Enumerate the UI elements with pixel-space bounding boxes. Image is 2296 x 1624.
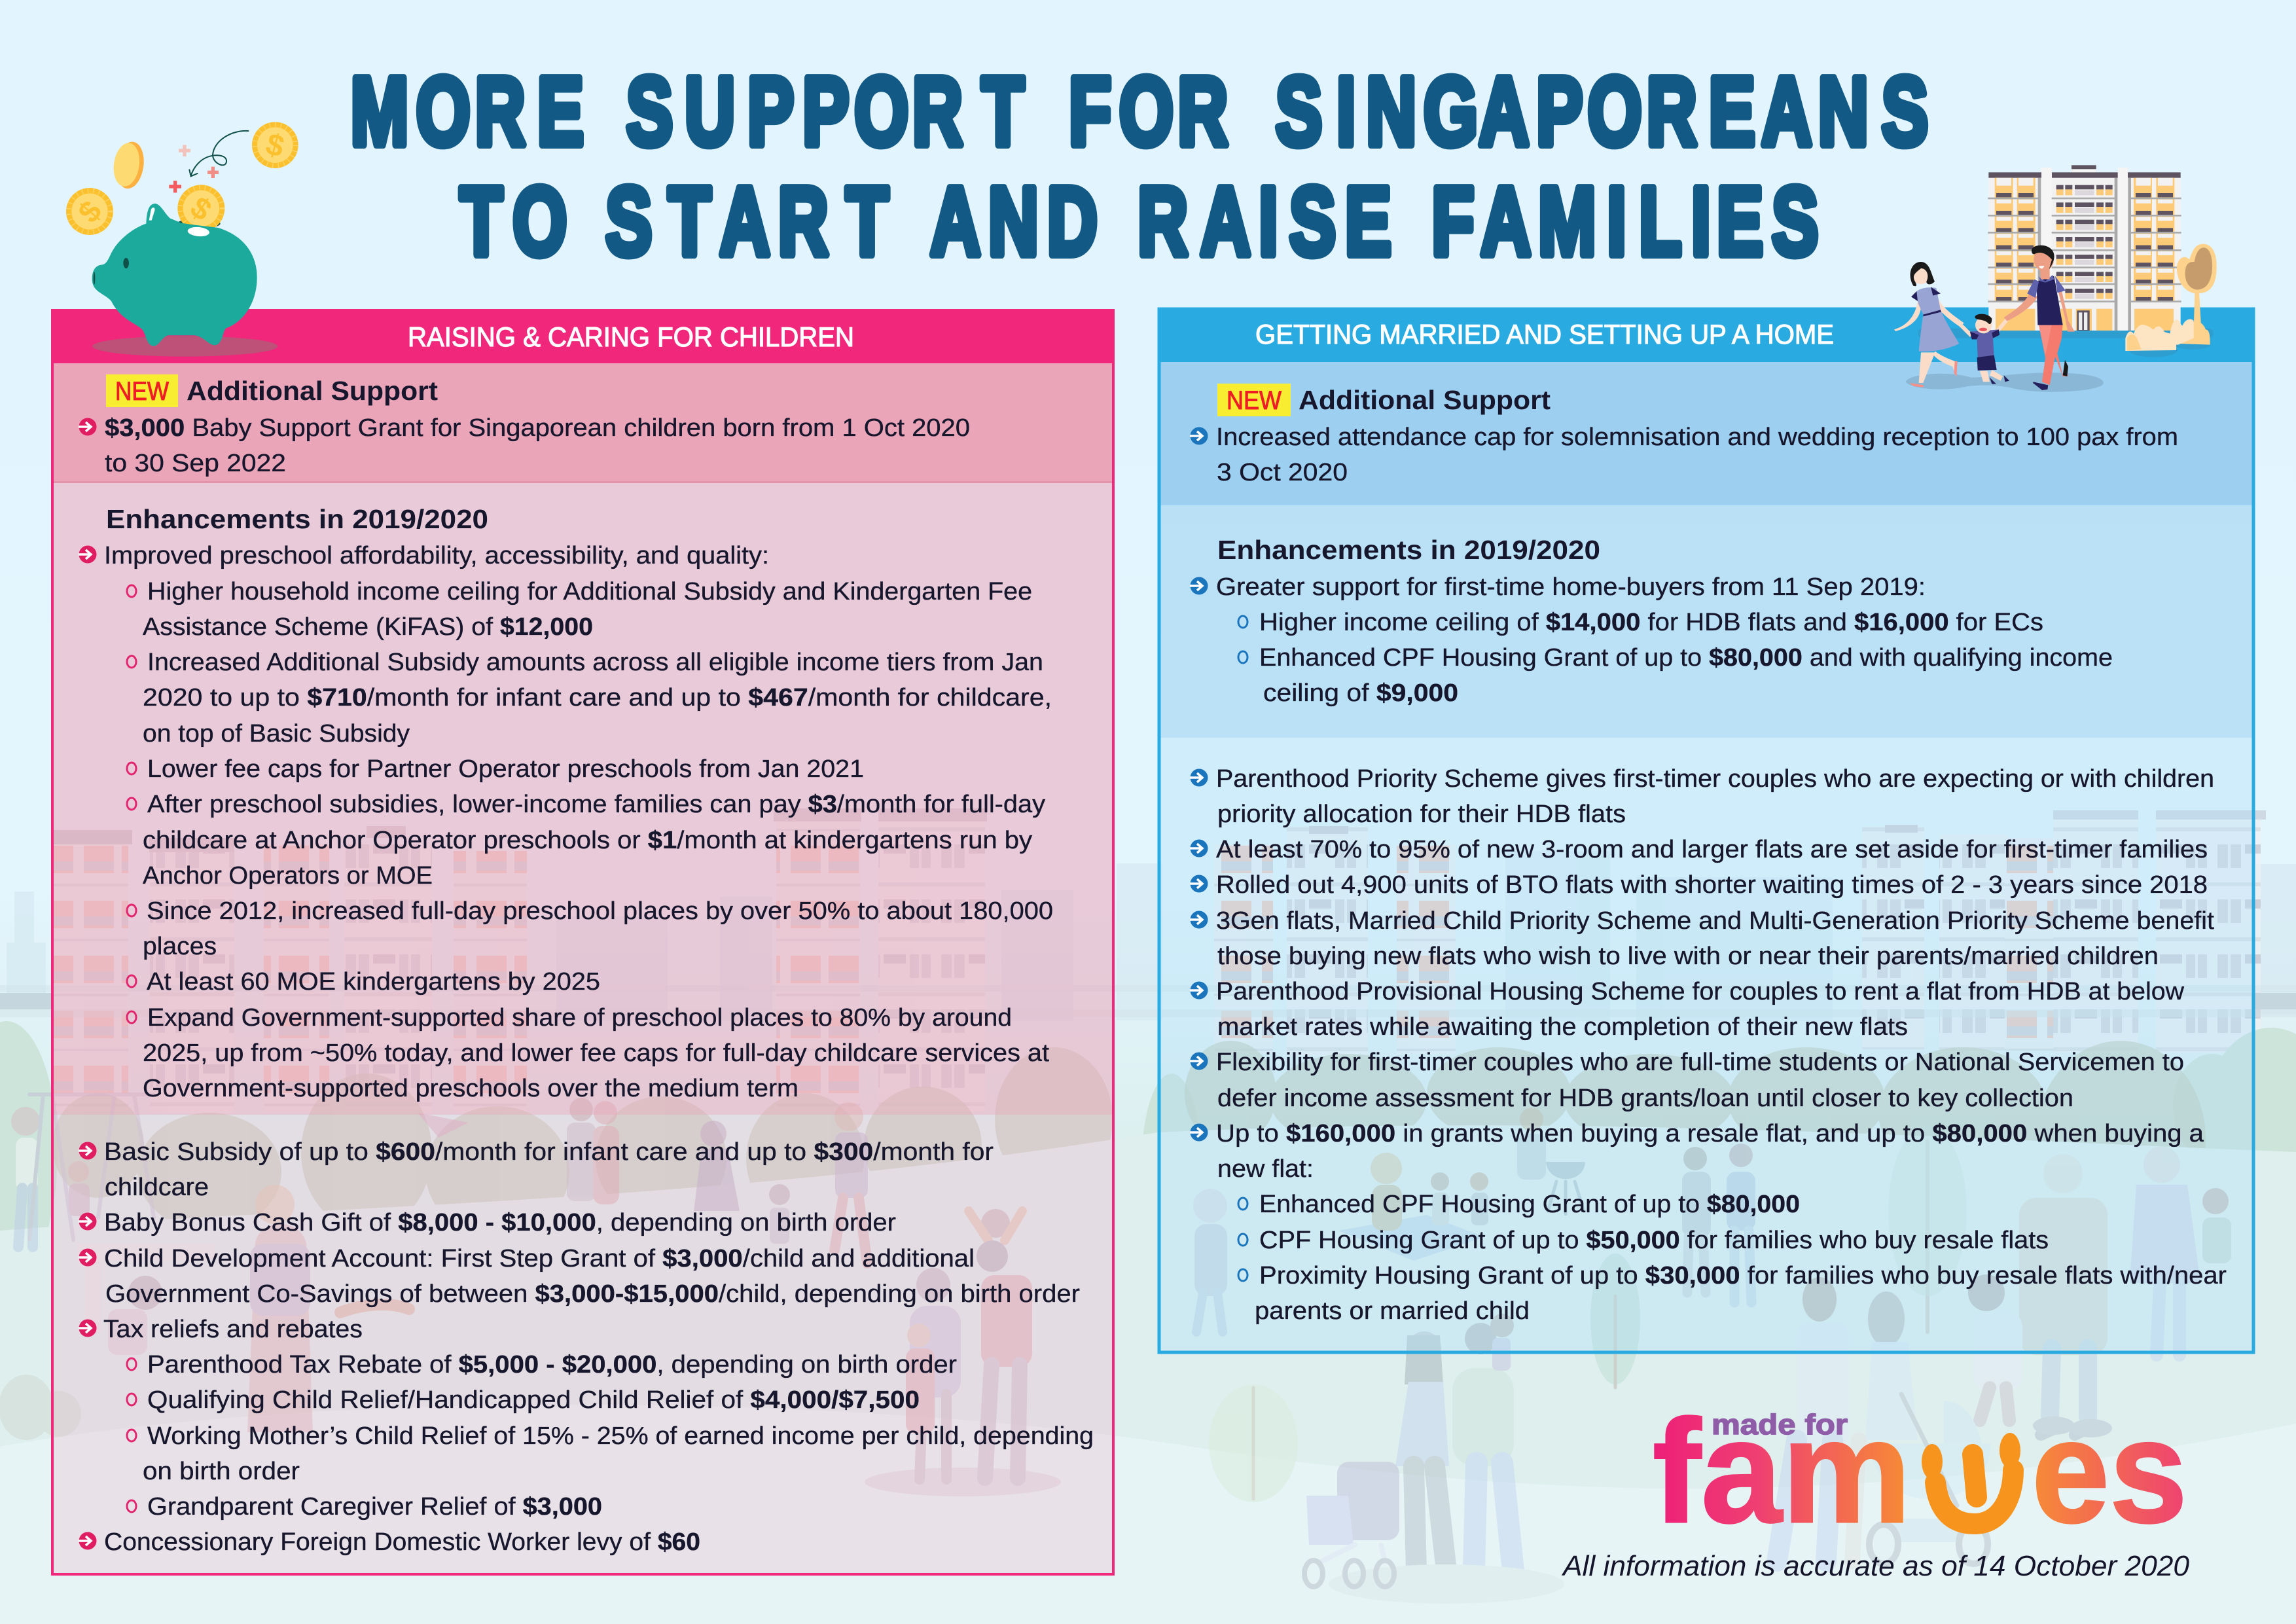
figure: grandmother far left of right panel [1193, 1189, 1227, 1332]
sub bullet: income ceiling: Higher income ceiling of $14,000 for HDB flats and $16,000 for ECs [1259, 609, 2043, 636]
panel body tint [51, 309, 1115, 1576]
figure: pregnant woman and man with child [1329, 1314, 1564, 1604]
sub bullet: proximity grant: Proximity Housing Grant of up to $30,000 for families who buy resale flats with/near [1259, 1262, 2227, 1290]
pig nostril [94, 272, 95, 285]
sub bullet: after preschool subsidies [127, 791, 1045, 890]
text block: left new additional support [79, 374, 970, 477]
bullet: 3Gen flats [1190, 907, 2214, 970]
coin: entering slot [177, 185, 224, 232]
heading: additional support: Additional Support [1299, 385, 1551, 415]
bullet: parenthood priority scheme: priority allocation for their HDB flats [1217, 801, 1626, 828]
bullet: foreign domestic worker levy: Concessionary Foreign Domestic Worker levy of $60 [104, 1528, 700, 1556]
bullet: flexibility for students [1190, 1049, 2184, 1112]
coin: entering slot: $ [185, 190, 218, 227]
sub bullet: additional subsidy amounts: on top of Basic Subsidy [143, 720, 410, 748]
sub bullet: lower fee caps: Lower fee caps for Partner Operator preschools from Jan 2021 [147, 755, 864, 783]
building ground floor [1996, 309, 2174, 331]
panel: getting married and setting up a home [1158, 308, 2255, 1354]
coin: left: $ [71, 194, 109, 229]
footnote: All information is accurate as of 14 October 2020 [1561, 1550, 2190, 1582]
slot [177, 219, 221, 228]
building ledges [1988, 198, 2181, 302]
figure: woman [1894, 262, 1964, 388]
new badge: NEW [1227, 386, 1282, 415]
text block: right enhancements in 2019/2020 [1190, 535, 2113, 707]
sub bullet: income ceiling: Higher household income ceiling for Additional Subsidy and Kindergarten Fee [147, 578, 1032, 605]
panel header [51, 309, 1115, 363]
bullet: provisional housing [1190, 978, 2185, 1041]
faded park people [0, 1094, 2231, 1604]
sub bullet: preschool places [127, 897, 1053, 960]
bullet: first-time home buyers: Greater support for first-time home-buyers from 11 Sep 2019: [1216, 573, 1926, 601]
bullet: grants: Up to $160,000 in grants when buying a resale flat, and up to $80,000 when buying a [1216, 1120, 2204, 1147]
bullet: preschool: Improved preschool affordability, accessibility, and quality: [104, 542, 769, 569]
logo word start: fam [1653, 1390, 1911, 1553]
section: additional support background [1160, 362, 2253, 505]
figure: grandparents and child [2019, 1146, 2231, 1435]
sub bullet: after preschool subsidies: After preschool subsidies, lower-income families can pay $3/month for full-day [147, 791, 1045, 818]
bullet: flexibility for students: Flexibility for first-timer couples who are full-time students or National Servicemen to [1216, 1049, 2184, 1076]
sub bullet: additional subsidy amounts: 2020 to up to $710/month for infant care and up to $467/month for childcare, [143, 684, 1052, 712]
figure: young trees [1209, 1126, 1967, 1502]
plus marks [169, 145, 219, 192]
sub bullet: preschool places: places [143, 933, 217, 960]
icon: piggy bank with coins [66, 122, 298, 357]
bullet: parenthood priority scheme: Parenthood Priority Scheme gives first-timer couples who are expecting or with children [1216, 765, 2214, 793]
figure: couple in back [567, 1098, 619, 1204]
sub bullet: government supported share [127, 1004, 1049, 1102]
bullet: 3Gen flats: 3Gen flats, Married Child Priority Scheme and Multi-Generation Priority Scheme benefit [1216, 907, 2214, 935]
title: TO START AND RAISE FAMILIES [460, 168, 1818, 276]
building wing right [2134, 178, 2174, 302]
bullet: baby support grant: to 30 Sep 2022 [105, 450, 286, 477]
coin: top right [252, 122, 298, 168]
pig body [92, 204, 257, 346]
logo word end: es [2032, 1390, 2187, 1553]
bullet: 3Gen flats: those buying new flats who wish to live with or near their parents/married children [1217, 943, 2159, 970]
header: raising and caring for children: RAISING & CARING FOR CHILDREN [408, 321, 854, 352]
section tint: enhancements [1160, 505, 2253, 738]
sub bullet: CPF grant: CPF Housing Grant of up to $50,000 for families who buy resale flats [1259, 1227, 2049, 1254]
pig shadow [92, 336, 278, 357]
figure: people behind tree [1777, 1274, 2022, 1561]
text block: right new additional support [1190, 384, 2178, 486]
text block: left other support [79, 1138, 1094, 1556]
sub bullet: income ceiling: Assistance Scheme (KiFAS) of $12,000 [143, 613, 593, 641]
title: MORE SUPPORT FOR SINGAPOREANS [351, 58, 1928, 166]
bullet: baby bonus: Baby Bonus Cash Gift of $8,000 - $10,000 , depending on birth order [104, 1209, 896, 1236]
figure: lady in hijab [247, 1185, 313, 1432]
text block: left enhancements in 2019/2020 [79, 504, 1053, 1102]
pig highlights [187, 226, 210, 237]
sub bullet: parenthood tax rebate: Parenthood Tax Rebate of $5,000 - $20,000 , depending on birth order [147, 1351, 957, 1379]
park lawn [0, 1125, 2296, 1624]
coin: edge on [111, 139, 147, 190]
sub bullet: additional subsidy amounts [127, 649, 1052, 748]
elevated train line [0, 985, 2296, 1017]
bullet: flexibility for students: defer income assessment for HDB grants/loan until closer to key collection [1217, 1085, 2073, 1112]
figure: bushes low left [0, 1375, 81, 1440]
sub bullet: after preschool subsidies: childcare at Anchor Operator preschools or $1/month at kindergartens run by [143, 827, 1032, 854]
bullet: attendance cap: Increased attendance cap for solemnisation and wedding reception to 100 pax from [1216, 424, 2178, 451]
sub bullet: after preschool subsidies: Anchor Operators or MOE [143, 862, 433, 890]
figure: family bottom right in left panel [865, 1209, 1061, 1496]
bullet: baby support grant: $3,000 Baby Support Grant for Singaporean children born from 1 Oct 2020 [105, 414, 970, 442]
figure: dancing family [694, 1102, 868, 1263]
pig eye [123, 258, 129, 268]
panel border [1159, 309, 2253, 1352]
figure: kite [418, 1113, 469, 1138]
figure: stroller left [1304, 1462, 1399, 1587]
sub bullet: additional subsidy amounts: Increased Additional Subsidy amounts across all eligible income tiers from Jan [147, 649, 1043, 676]
panel body tint [1158, 308, 2255, 1354]
building centre windows [2056, 185, 2113, 299]
sub bullet: proximity grant [1238, 1262, 2227, 1325]
sub bullet: working mother relief: Working Mother’s Child Relief of 15% - 25% of earned income per child, depending [147, 1422, 1094, 1450]
section: additional support background [53, 363, 1113, 482]
panel: raising and caring for children [51, 309, 1115, 1576]
new badge: NEW [115, 377, 169, 406]
sub bullet: income ceiling [127, 578, 1032, 641]
bullet: attendance cap [1190, 424, 2178, 486]
family shadow [1906, 372, 2104, 392]
arrow: swirling [189, 131, 248, 176]
figure: couple near grill [1682, 1144, 1755, 1303]
heading: additional support: Additional Support [187, 376, 438, 406]
figure: picnic blanket and people [1338, 1153, 1488, 1261]
building [1918, 165, 2214, 338]
bullet: tax reliefs: Tax reliefs and rebates [103, 1316, 363, 1343]
sub bullet: grandparent relief: Grandparent Caregiver Relief of $3,000 [147, 1493, 602, 1521]
bullet: baby support grant [79, 414, 970, 477]
illustration: family and HDB block [1894, 165, 2217, 392]
bushes [2125, 319, 2210, 351]
bullet: basic subsidy: childcare [105, 1174, 209, 1201]
sub bullet: CPF housing grant: Enhanced CPF Housing Grant of up to $80,000 and with qualifying income [1259, 644, 2113, 672]
sub bullet: proximity grant: parents or married child [1255, 1297, 1530, 1325]
sub bullet: government supported share: Government-supported preschools over the medium term [143, 1075, 798, 1102]
sub bullet: working mother relief [127, 1422, 1094, 1485]
figure: shoes of right couple [2033, 1416, 2112, 1437]
building wing left [1995, 178, 2036, 302]
sub bullet: CPF housing grant [1238, 644, 2113, 707]
sub bullet: working mother relief: on birth order [143, 1458, 300, 1485]
bullet: parenthood priority scheme [1190, 765, 2214, 828]
sub bullet: government supported share: Expand Government-supported share of preschool places to 80% by around [147, 1004, 1012, 1032]
panel header [1158, 308, 2255, 362]
logo tagline: made for [1712, 1409, 1848, 1441]
sub bullet: CPF housing grant: ceiling of $9,000 [1263, 679, 1458, 707]
figure: swing set [29, 1094, 154, 1240]
figure: boy [1958, 314, 2011, 384]
bullet: provisional housing: market rates while awaiting the completion of their new flats [1217, 1013, 1908, 1041]
sub bullet: preschool places: Since 2012, increased full-day preschool places by over 50% to about 180,000 [147, 897, 1053, 925]
figure: girl with dog and bench [77, 1244, 409, 1355]
figure: stroller right [1869, 1394, 1991, 1564]
heading: enhancements: Enhancements in 2019/2020 [1217, 535, 1600, 565]
bullet: grants [1190, 1120, 2204, 1183]
faded housing blocks [51, 808, 2266, 1113]
title [351, 58, 1928, 276]
section tint: enhancements [53, 482, 1113, 1115]
figure: man [2004, 245, 2075, 390]
tree [2129, 244, 2217, 357]
bullet: basic subsidy [79, 1138, 994, 1201]
logo: made for families [1653, 1390, 2187, 1553]
bullet: grants: new flat: [1217, 1155, 1314, 1183]
text block: right other support [1190, 765, 2227, 1325]
sub bullet: MOE kindergartens: At least 60 MOE kindergartens by 2025 [147, 968, 600, 996]
bullet: child development account: Government Co-Savings of between $3,000-$15,000 /child, depending on birth order [105, 1280, 1080, 1308]
bullet: provisional housing: Parenthood Provisional Housing Scheme for couples to rent a flat from HDB at below [1216, 978, 2185, 1005]
heading: enhancements: Enhancements in 2019/2020 [106, 504, 488, 534]
bullet: child development account: Child Development Account: First Step Grant of $3,000/child and additional [104, 1245, 975, 1272]
header: getting married and setting up a home: GETTING MARRIED AND SETTING UP A HOME [1255, 319, 1834, 350]
figure: woman at far left [11, 1107, 40, 1247]
logo smile [1922, 1433, 2020, 1524]
back trees and bushes [0, 1021, 2296, 1283]
bullet: child development account [79, 1245, 1080, 1308]
sub bullet: qualifying child relief: Qualifying Child Relief/Handicapped Child Relief of $4,000/$7,500 [147, 1386, 920, 1414]
bullet: BTO flats: Rolled out 4,900 units of BTO flats with shorter waiting times of 2 - 3 years since 2018 [1216, 871, 2208, 899]
bullet: basic subsidy: Basic Subsidy of up to $600/month for infant care and up to $300/month for [104, 1138, 994, 1166]
sub bullet: government supported share: 2025, up from ~50% today, and lower fee caps for full-day childcare services at [143, 1039, 1049, 1067]
figure: barbecue grill [1517, 1108, 1585, 1214]
panel border [52, 310, 1113, 1574]
bullet: flats set aside: At least 70% to 95% of new 3-room and larger flats are set aside for first-timer families [1216, 836, 2208, 863]
bullet: attendance cap: 3 Oct 2020 [1217, 459, 1348, 486]
coin: top right: $ [262, 126, 288, 164]
sub bullet: enhanced CPF grant: Enhanced CPF Housing Grant of up to $80,000 [1259, 1191, 1800, 1218]
coin: left [66, 188, 113, 235]
